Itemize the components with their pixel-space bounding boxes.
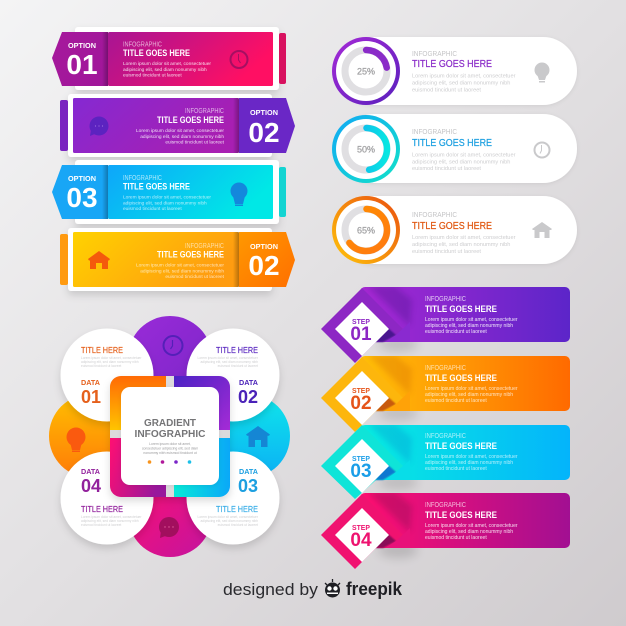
step badge: 03 — [350, 461, 372, 482]
step 03: adipiscing elit, sed diam nonummy nibh — [425, 460, 513, 466]
ring chart 65% — [332, 196, 400, 264]
step 04: TITLE GOES HERE — [425, 510, 497, 521]
data 01 circle: Lorem ipsum dolor sit amet, consectetuer — [81, 356, 142, 360]
data 03 circle: adipiscing elit, sed diam nonummy nibh — [200, 519, 258, 523]
step badge — [335, 439, 389, 493]
option 01 banner: TITLE GOES HERE — [123, 48, 190, 58]
data 02 circle: euismod tincidunt ut laoreet — [218, 364, 258, 368]
step 04: INFOGRAPHIC — [425, 502, 466, 509]
pill 65% — [332, 196, 577, 264]
pill 50%: Lorem ipsum dolor sit amet, consectetuer — [412, 152, 516, 158]
panel: gradient flower diagram — [49, 316, 290, 557]
ring chart 25%: 25% — [357, 66, 375, 76]
data 04 circle: DATA — [81, 467, 101, 476]
pill 25%: TITLE GOES HERE — [412, 59, 492, 70]
data 03 circle: DATA — [239, 467, 259, 476]
ring chart 50% — [332, 115, 400, 183]
data 04 circle: 04 — [81, 476, 101, 496]
option 01 banner: 01 — [66, 49, 98, 80]
pill 65%: euismod tincidunt ut laoreet — [412, 249, 481, 255]
step 01: adipiscing elit, sed diam nonummy nibh — [425, 323, 513, 329]
option 04 banner: adipiscing elit, sed diam nonummy nibh — [140, 268, 224, 274]
center card: Lorem ipsum dolor sit amet, — [149, 442, 191, 446]
data 01 circle: DATA — [81, 378, 101, 387]
pill 65%: Lorem ipsum dolor sit amet, consectetuer — [412, 235, 516, 241]
step 04: Lorem ipsum dolor sit amet, consectetuer — [425, 523, 518, 529]
data 04 circle: adipiscing elit, sed diam nonummy nibh — [81, 519, 139, 523]
pill 50%: TITLE GOES HERE — [412, 138, 492, 149]
option 02 banner: Lorem ipsum dolor sit amet, consectetuer — [136, 128, 224, 134]
step badge: 04 — [350, 530, 372, 551]
step 01: TITLE GOES HERE — [425, 304, 497, 315]
data 02 circle: adipiscing elit, sed diam nonummy nibh — [200, 360, 258, 364]
option 03 banner: INFOGRAPHIC — [123, 175, 162, 182]
pill 25%: euismod tincidunt ut laoreet — [412, 87, 481, 93]
option 01 banner: euismod tincidunt ut laoreet — [123, 72, 182, 78]
icon: chat — [159, 517, 179, 538]
step 01: Lorem ipsum dolor sit amet, consectetuer — [425, 317, 518, 323]
step 04: euismod tincidunt ut laoreet — [425, 535, 487, 541]
petal: right house — [206, 394, 290, 478]
option 01 banner: OPTION — [68, 41, 96, 50]
data 04 circle: euismod tincidunt ut laoreet — [81, 523, 121, 527]
petal: bottom chat — [128, 473, 212, 557]
data 02 circle: 02 — [238, 387, 258, 407]
center square frame — [110, 376, 230, 497]
step badge — [335, 508, 389, 562]
data 01 circle: euismod tincidunt ut laoreet — [81, 364, 121, 368]
data 01 circle: TITLE HERE — [81, 346, 123, 355]
step 03 — [321, 424, 570, 499]
icon: bulb — [230, 182, 248, 206]
step 01 — [321, 286, 570, 363]
option 02 banner: euismod tincidunt ut laoreet — [165, 140, 225, 146]
option 03 banner: euismod tincidunt ut laoreet — [123, 206, 182, 212]
step 02: euismod tincidunt ut laoreet — [425, 398, 487, 404]
data 04 circle: TITLE HERE — [81, 505, 123, 514]
step badge: STEP — [352, 454, 370, 463]
option 02 banner: TITLE GOES HERE — [157, 115, 224, 125]
step 04: adipiscing elit, sed diam nonummy nibh — [425, 529, 513, 535]
data 03 circle: Lorem ipsum dolor sit amet, consectetuer — [198, 515, 259, 519]
panel: option banners — [52, 27, 295, 291]
data 03 circle: euismod tincidunt ut laoreet — [218, 523, 258, 527]
footer credit: designed by — [223, 580, 319, 599]
data 04 circle — [60, 452, 154, 544]
step badge: STEP — [352, 317, 370, 326]
option 01 banner: INFOGRAPHIC — [123, 42, 162, 48]
step 02: INFOGRAPHIC — [425, 365, 466, 372]
option 03 banner — [52, 160, 286, 224]
data 02 circle: TITLE HERE — [216, 346, 258, 355]
option 02 banner — [60, 94, 295, 157]
data 02 circle: Lorem ipsum dolor sit amet, consectetuer — [198, 356, 259, 360]
data 03 circle: TITLE HERE — [216, 505, 258, 514]
pill 25%: Lorem ipsum dolor sit amet, consectetuer — [412, 74, 516, 80]
pill 65%: TITLE GOES HERE — [412, 221, 492, 232]
option 04 banner: OPTION — [250, 242, 278, 251]
icon: freepik logo — [325, 579, 340, 598]
pill 25%: adipiscing elit, sed diam nonummy nibh — [412, 80, 510, 86]
ring chart 65%: 65% — [357, 226, 375, 236]
step badge — [335, 371, 389, 425]
option 04 banner: INFOGRAPHIC — [185, 243, 224, 250]
icon: clock — [230, 51, 248, 68]
icon: clock — [534, 142, 550, 158]
step 02: Lorem ipsum dolor sit amet, consectetuer — [425, 386, 518, 392]
panel: progress pills — [332, 37, 577, 264]
option 01 banner — [52, 27, 286, 90]
step 03: Lorem ipsum dolor sit amet, consectetuer — [425, 454, 518, 460]
step badge: STEP — [352, 386, 370, 395]
step badge — [335, 302, 389, 356]
icon: house — [246, 426, 270, 447]
option 04 banner — [60, 228, 295, 291]
step badge: 01 — [350, 324, 372, 345]
icon: chat — [90, 116, 108, 136]
footer credit: freepik — [346, 578, 403, 599]
option 04 banner: TITLE GOES HERE — [157, 250, 224, 260]
option 02 banner: 02 — [248, 117, 280, 148]
step 01: INFOGRAPHIC — [425, 296, 466, 303]
data 02 circle — [186, 328, 280, 422]
footer credit — [223, 578, 403, 599]
data 01 circle — [60, 328, 154, 422]
option 03 banner: 03 — [66, 182, 98, 213]
data 02 circle: DATA — [239, 378, 259, 387]
data 03 circle — [186, 452, 280, 544]
step badge: STEP — [352, 523, 370, 532]
center card: nonummy nibh euismod tincidunt ut — [143, 451, 197, 455]
step 02: adipiscing elit, sed diam nonummy nibh — [425, 392, 513, 398]
step 03: INFOGRAPHIC — [425, 433, 466, 440]
option 01 banner: adipiscing elit, sed diam nonummy nibh — [123, 67, 207, 73]
step 03: euismod tincidunt ut laoreet — [425, 466, 487, 472]
step 01: euismod tincidunt ut laoreet — [425, 329, 487, 335]
panel: step banners — [321, 286, 570, 569]
icon: house — [532, 222, 552, 238]
option 02 banner: INFOGRAPHIC — [185, 108, 224, 115]
icon: bulb — [534, 62, 550, 82]
icon: bulb — [66, 428, 86, 452]
pill 50%: adipiscing elit, sed diam nonummy nibh — [412, 159, 510, 165]
center card: GRADIENT — [144, 418, 196, 429]
ring chart 50%: 50% — [357, 144, 375, 154]
option 02 banner: OPTION — [250, 108, 278, 117]
data 01 circle: adipiscing elit, sed diam nonummy nibh — [81, 360, 139, 364]
step 02 — [321, 355, 570, 432]
pill 65%: INFOGRAPHIC — [412, 210, 457, 219]
option 03 banner: TITLE GOES HERE — [123, 182, 190, 192]
option 04 banner: 02 — [248, 250, 280, 281]
pill 50%: INFOGRAPHIC — [412, 127, 457, 136]
icon: house — [88, 251, 110, 269]
center card: INFOGRAPHIC — [134, 429, 206, 440]
option 03 banner: OPTION — [68, 174, 96, 183]
step 03: TITLE GOES HERE — [425, 441, 497, 452]
center card — [121, 387, 219, 485]
ring chart 25% — [332, 37, 400, 105]
data 01 circle: 01 — [81, 387, 101, 407]
option 01 banner: Lorem ipsum dolor sit amet, consectetuer — [123, 61, 211, 67]
indicator dots — [148, 460, 191, 464]
step 04 — [321, 492, 570, 569]
option 03 banner: Lorem ipsum dolor sit amet, consectetuer — [123, 194, 211, 200]
option 04 banner: Lorem ipsum dolor sit amet, consectetuer — [136, 262, 224, 268]
option 04 banner: euismod tincidunt ut laoreet — [165, 274, 225, 280]
pill 25%: INFOGRAPHIC — [412, 49, 457, 58]
data 04 circle: Lorem ipsum dolor sit amet, consectetuer — [81, 515, 142, 519]
step badge: 02 — [350, 393, 372, 414]
petal: left bulb — [49, 394, 133, 478]
option 03 banner: adipiscing elit, sed diam nonummy nibh — [123, 200, 207, 206]
data 03 circle: 03 — [238, 476, 258, 496]
icon: clock — [164, 336, 182, 355]
petal: top clock — [128, 316, 212, 400]
center card: consectetuer adipiscing elit, sed diam — [142, 446, 198, 450]
pill 50% — [332, 114, 577, 183]
pill 25% — [332, 37, 577, 105]
pill 50%: euismod tincidunt ut laoreet — [412, 166, 481, 172]
option 02 banner: adipiscing elit, sed diam nonummy nibh — [140, 134, 224, 140]
pill 65%: adipiscing elit, sed diam nonummy nibh — [412, 242, 510, 248]
step 02: TITLE GOES HERE — [425, 373, 497, 384]
